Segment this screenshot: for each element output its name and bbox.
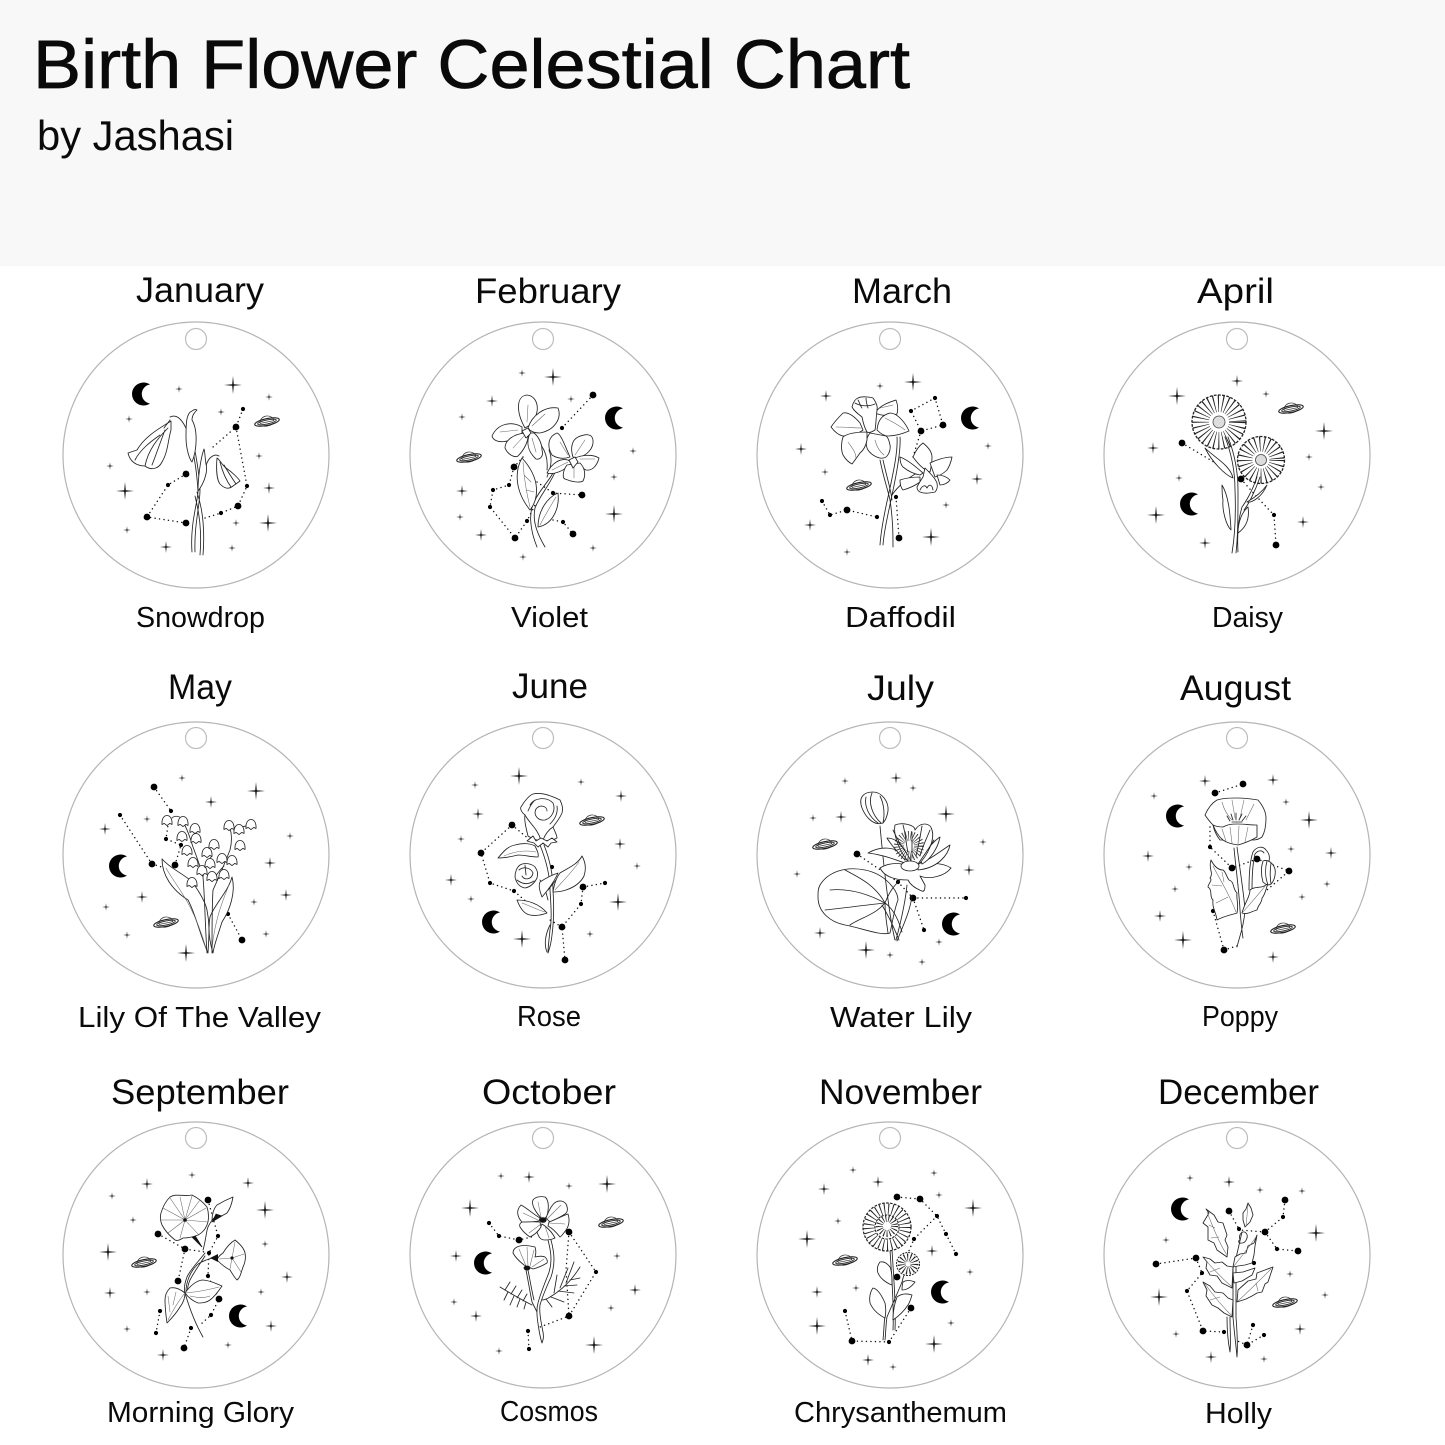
- icon: ringed planet: [131, 1255, 157, 1269]
- icon: crescent moon: [229, 1304, 247, 1328]
- panel: August, Poppy: [1104, 669, 1370, 1033]
- stars: [798, 1166, 982, 1371]
- icon: crescent moon: [482, 910, 500, 934]
- hanging hole: [532, 328, 554, 350]
- icon: ringed planet: [456, 450, 482, 464]
- panel: October, Cosmos: [410, 1073, 676, 1428]
- icon: crescent moon: [132, 382, 150, 406]
- icon: ringed planet: [812, 837, 838, 851]
- flower name: Daffodil: [845, 602, 956, 634]
- flower: snowdrop: [128, 410, 240, 555]
- constellation: [820, 396, 946, 541]
- hanging hole: [1226, 328, 1248, 350]
- panel: July, Water Lily: [757, 669, 1023, 1034]
- icon: ringed planet: [1272, 1295, 1298, 1309]
- constellation: [478, 822, 607, 963]
- flower name: Chrysanthemum: [794, 1397, 1007, 1429]
- ornament disc: [410, 1122, 676, 1388]
- month heading: June: [512, 667, 588, 706]
- hanging hole: [532, 728, 554, 748]
- stars: [450, 1171, 641, 1355]
- constellation: [1179, 440, 1279, 548]
- panel: November, Chrysanthemum: [757, 1073, 1023, 1429]
- flower name: Holly: [1205, 1398, 1273, 1430]
- stars: [106, 376, 277, 553]
- stars: [456, 368, 637, 561]
- panel: December, Holly: [1104, 1073, 1370, 1430]
- icon: ringed planet: [254, 414, 280, 428]
- panel: May, Lily Of The Valley: [63, 668, 329, 1034]
- constellation: [118, 784, 245, 943]
- month heading: March: [852, 272, 952, 311]
- icon: crescent moon: [1166, 804, 1184, 828]
- flower: lily of the valley: [162, 816, 256, 953]
- flower: violet: [492, 395, 599, 547]
- flower name: Daisy: [1212, 602, 1283, 634]
- hanging hole: [880, 728, 900, 748]
- icon: ringed planet: [832, 1253, 858, 1267]
- icon: ringed planet: [1278, 401, 1304, 415]
- panel: January, Snowdrop: [63, 271, 329, 634]
- hanging hole: [880, 328, 900, 350]
- stars: [795, 373, 992, 556]
- flower: cosmos: [500, 1197, 580, 1343]
- constellation: [1208, 781, 1292, 953]
- month heading: July: [867, 669, 935, 708]
- constellation: [1153, 1197, 1301, 1348]
- flower: daisy: [1192, 395, 1284, 553]
- stars: [1147, 375, 1333, 549]
- stars: [99, 1171, 293, 1361]
- month heading: August: [1180, 669, 1291, 708]
- flower: chrysanthemum: [863, 1203, 920, 1340]
- icon: crescent moon: [474, 1252, 492, 1274]
- flower name: Rose: [517, 1001, 581, 1033]
- ornament disc: [1104, 1122, 1370, 1388]
- panel: February, Violet: [410, 272, 676, 634]
- month heading: February: [475, 272, 622, 311]
- hanging hole: [880, 1128, 900, 1148]
- month heading: January: [136, 271, 264, 310]
- ornament disc: [410, 722, 676, 988]
- hanging hole: [186, 328, 206, 350]
- constellation: [843, 1194, 958, 1344]
- month heading: May: [168, 668, 232, 707]
- constellation: [154, 1197, 222, 1351]
- hanging hole: [532, 1128, 554, 1148]
- icon: crescent moon: [931, 1280, 949, 1304]
- icon: ringed planet: [846, 478, 872, 492]
- constellation: [854, 851, 968, 932]
- flower name: Lily Of The Valley: [78, 1002, 322, 1034]
- flower: rose: [498, 793, 585, 953]
- month heading: September: [111, 1073, 289, 1112]
- month heading: November: [819, 1073, 982, 1112]
- icon: crescent moon: [961, 406, 979, 430]
- month heading: December: [1158, 1073, 1319, 1112]
- flower name: Morning Glory: [107, 1397, 295, 1429]
- ornament disc: [757, 722, 1023, 988]
- month heading: October: [482, 1073, 616, 1112]
- flower: morning glory: [160, 1195, 245, 1337]
- flower name: Violet: [511, 602, 588, 634]
- month heading: April: [1197, 272, 1274, 311]
- flower: water lily: [818, 792, 951, 941]
- icon: crescent moon: [605, 406, 623, 430]
- flower: daffodil: [831, 397, 952, 547]
- hanging hole: [186, 728, 206, 748]
- icon: crescent moon: [1171, 1198, 1189, 1220]
- hanging hole: [186, 1128, 206, 1148]
- panel: March, Daffodil: [757, 272, 1023, 634]
- icon: crescent moon: [1180, 492, 1198, 516]
- flower: poppy: [1205, 798, 1275, 947]
- hanging hole: [1226, 1128, 1248, 1148]
- ornament disc: [757, 1122, 1023, 1388]
- ornament disc: [63, 1122, 329, 1388]
- hanging hole: [1226, 728, 1248, 748]
- ornament disc: [1104, 722, 1370, 988]
- panel: June, Rose: [410, 667, 676, 1033]
- stars: [1142, 774, 1337, 963]
- constellation: [144, 407, 249, 526]
- flower name: Cosmos: [500, 1396, 598, 1428]
- ornament disc: [63, 722, 329, 988]
- panel: April, Daisy: [1104, 272, 1370, 634]
- icon: ringed planet: [598, 1215, 624, 1229]
- ornament disc: [1104, 322, 1370, 588]
- icon: crescent moon: [942, 912, 960, 936]
- stars: [445, 767, 641, 948]
- icon: ringed planet: [579, 813, 605, 827]
- header band: [0, 0, 1445, 266]
- byline: by Jashasi: [37, 112, 234, 159]
- panel: September, Morning Glory: [63, 1073, 329, 1429]
- ornament disc: [410, 322, 676, 588]
- flower name: Snowdrop: [136, 602, 265, 634]
- stars: [793, 772, 987, 966]
- flower name: Poppy: [1202, 1001, 1278, 1033]
- constellation: [487, 1221, 598, 1351]
- icon: ringed planet: [153, 915, 179, 929]
- ornament disc: [757, 322, 1023, 588]
- stars: [99, 774, 294, 962]
- title: Birth Flower Celestial Chart: [33, 26, 910, 103]
- ornament disc: [63, 322, 329, 588]
- stars: [1150, 1174, 1329, 1363]
- constellation: [488, 392, 596, 541]
- flower name: Water Lily: [830, 1002, 973, 1034]
- icon: crescent moon: [109, 854, 127, 878]
- flower: holly: [1203, 1203, 1273, 1357]
- icon: ringed planet: [1270, 921, 1296, 935]
